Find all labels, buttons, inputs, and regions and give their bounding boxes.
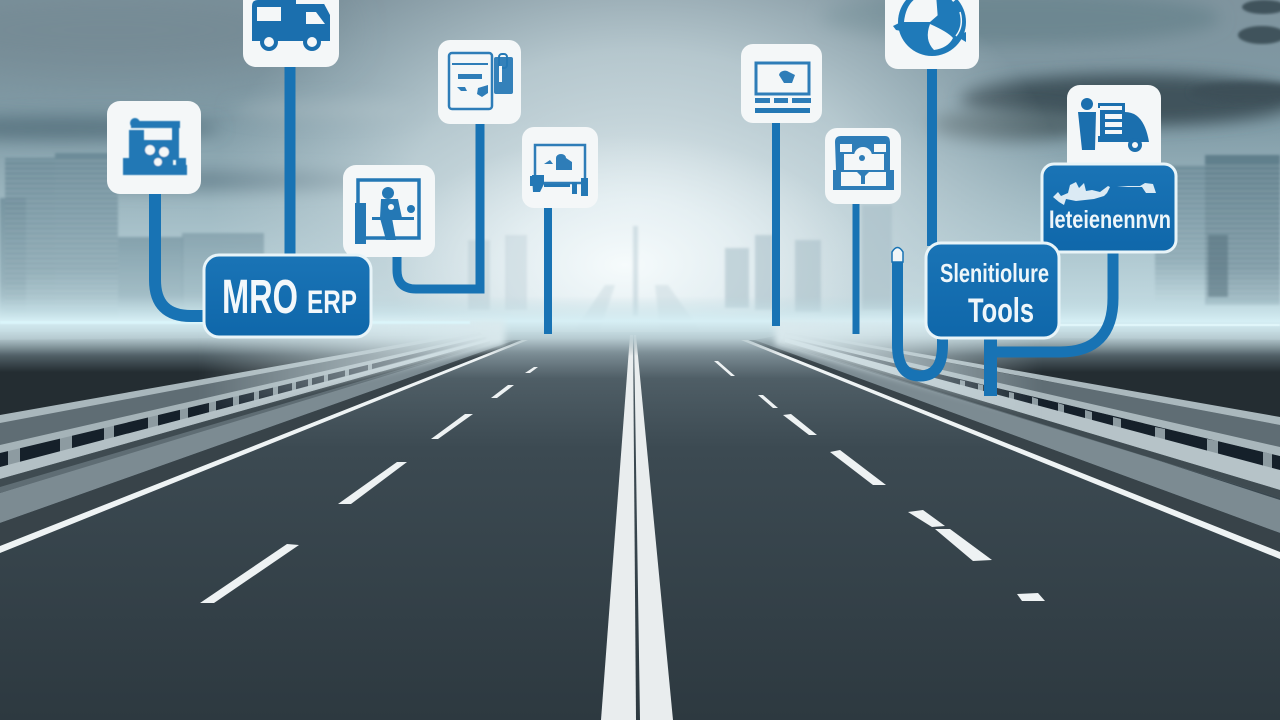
- icon card: person and van: [1067, 85, 1161, 175]
- connector: screen icon to road: [544, 206, 552, 334]
- dark verge left: [0, 335, 500, 418]
- label panel: upper right sign: Ieteienennvn: [1049, 206, 1171, 234]
- label panel: MRO ERP: ERP: [307, 284, 357, 320]
- label panel: upper right sign: [1042, 164, 1176, 252]
- left lane dashes: [200, 367, 538, 603]
- left guardrail: [0, 331, 490, 493]
- dark strip left: [0, 340, 522, 546]
- dark verge right: [770, 335, 1280, 420]
- road edge lines: [0, 340, 1280, 559]
- icon card: machine: [825, 128, 901, 204]
- connector: U bend: [898, 255, 942, 376]
- distant city skyline: [0, 153, 1280, 330]
- connectors: [155, 66, 1113, 396]
- horizon haze: [0, 296, 1280, 420]
- connector: left icon to MRO ERP: [155, 192, 206, 316]
- label panel: MRO ERP: [204, 255, 371, 337]
- icon card: monitor: [741, 44, 822, 123]
- icon card: left stack: [107, 101, 201, 194]
- icon card: desk worker: [343, 165, 435, 257]
- center double line: [601, 335, 673, 720]
- right guardrail: [780, 329, 1280, 498]
- right shoulder: [755, 336, 1280, 533]
- label panel: Tools: [926, 243, 1059, 338]
- left shoulder: [0, 340, 515, 523]
- icon card: globe: [885, 0, 979, 69]
- label panel: Tools: Slenitiolure: [940, 258, 1049, 288]
- road surface: [0, 332, 1280, 720]
- connector: monitor icon to road: [772, 122, 780, 326]
- icon card: screen tools: [522, 127, 598, 208]
- connector: truck to MRO ERP: [284, 66, 296, 256]
- icon card: document: [438, 40, 521, 124]
- connector: desk icon to hub: [397, 122, 480, 289]
- connector cap: [892, 248, 903, 262]
- icon card: truck: [243, 0, 339, 67]
- connector: globe to tools panel: [927, 68, 937, 246]
- faint road in the distance: [575, 285, 700, 330]
- connector: top panel to tools post: [994, 252, 1113, 352]
- sky background: [0, 0, 1280, 345]
- connector: tools post: [984, 336, 997, 396]
- dark strip right: [748, 340, 1280, 553]
- connector: machine icon to road: [852, 203, 860, 334]
- label panel: MRO ERP: MRO: [222, 271, 298, 324]
- right lane dashes: [714, 361, 1045, 601]
- label panel: Tools: Tools: [968, 292, 1034, 330]
